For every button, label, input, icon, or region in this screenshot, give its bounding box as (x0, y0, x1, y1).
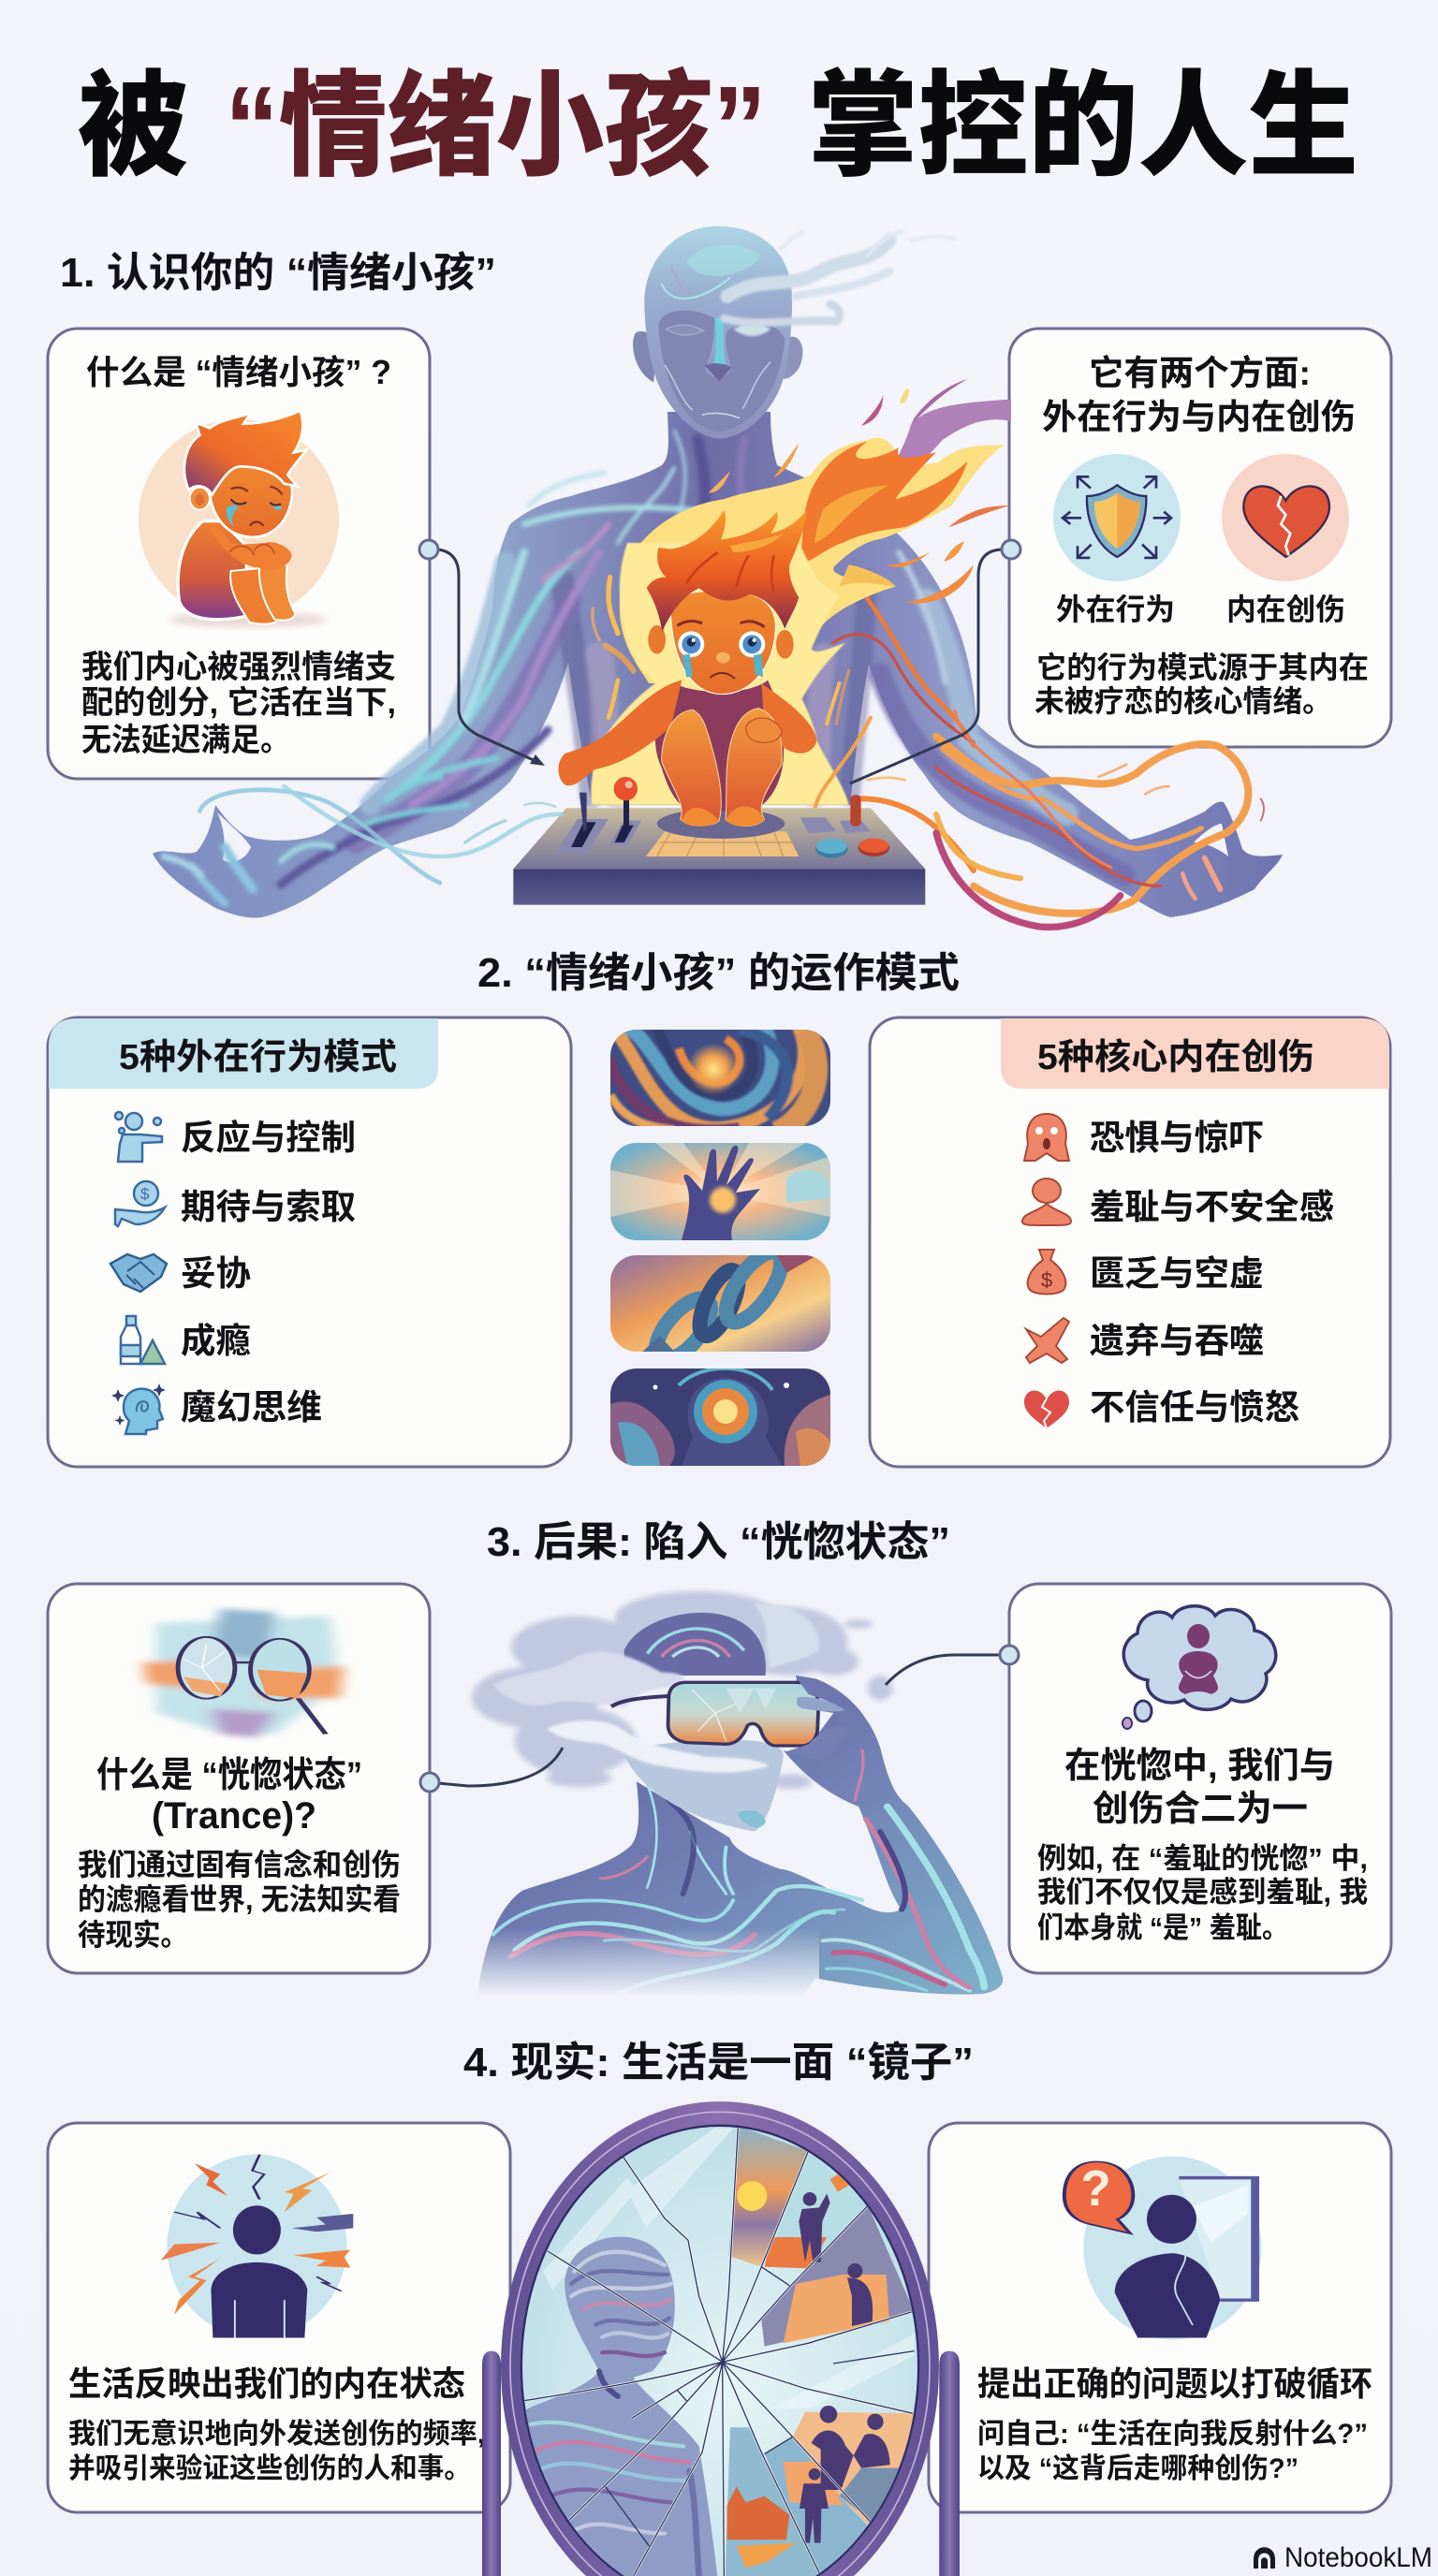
gaps inside hands (217, 812, 1228, 862)
card body text: 未被疗恋的核心情绪。 (1034, 684, 1332, 718)
item: compromise: 妥协 (181, 1254, 251, 1293)
card body text: 我们不仅仅是感到羞耻, 我 (1037, 1876, 1368, 1909)
item: scarcity: $ (1041, 1268, 1052, 1292)
icon labels: 内在创伤 (1226, 593, 1345, 626)
smoke from head (724, 231, 955, 323)
card heading: 什么是 “情绪小孩” ? (86, 353, 391, 391)
title (78, 63, 1358, 190)
connector: right card to goggles (886, 1646, 1019, 1685)
flames (620, 379, 1011, 683)
card body text: 们本身就 “是” 羞耻。 (1037, 1911, 1288, 1944)
tab heading (49, 1018, 438, 1089)
item: addiction: 成瘾 (181, 1322, 251, 1360)
icon: broken heart (1222, 454, 1349, 581)
card heading: 生活反映出我们的内在状态 (68, 2364, 465, 2403)
tab heading (1001, 1018, 1389, 1089)
reflected figure (521, 2237, 721, 2576)
panel: what is trance (48, 1584, 430, 1973)
item: expectation and demand (115, 1181, 356, 1226)
title: “情绪小孩” (225, 63, 767, 190)
icon: thought cloud with meditating figure (1123, 1606, 1276, 1729)
card body text: 我们内心被强烈情绪支 (81, 650, 396, 685)
glow around child (591, 543, 849, 805)
card body text (1037, 1842, 1368, 1944)
icon labels: 外在行为 (1056, 593, 1175, 626)
card heading: 提出正确的问题以打破循环 (977, 2364, 1372, 2403)
card body text (78, 1848, 401, 1952)
item: shame: 羞耻与不安全感 (1090, 1188, 1334, 1226)
image: swirl (610, 1030, 830, 1126)
card heading (96, 1756, 362, 1837)
panel: what is the emotional child (48, 329, 430, 779)
item: abandonment: 遗弃与吞噬 (1090, 1322, 1264, 1360)
central images column (599, 1020, 830, 1466)
heading: section 3: 3. 后果: 陷入 “恍惚状态” (487, 1519, 950, 1565)
image: chain (610, 1255, 830, 1352)
heading: section 4: 4. 现实: 生活是一面 “镜子” (463, 2040, 974, 2086)
heading: section 1: 1. 认识你的 “情绪小孩” (60, 250, 496, 296)
connector: left card to child (419, 540, 545, 766)
item: magical thinking (111, 1383, 322, 1434)
panel: five outer behaviours (48, 1017, 571, 1467)
item: fear: 恐惧与惊吓 (1090, 1119, 1264, 1157)
item: compromise (110, 1254, 251, 1293)
tab heading: 5种外在行为模式 (119, 1038, 397, 1077)
cloud behind head (472, 1591, 892, 1789)
flame tongues beside child and strands on the right side (593, 578, 974, 871)
icon: person with lightning bolts (161, 2155, 353, 2338)
card body text: 例如, 在 “羞耻的恍惚” 中, (1037, 1842, 1368, 1875)
soft colour areas and strands on arms and shoulders (164, 431, 1123, 903)
item: fear (1024, 1114, 1264, 1161)
item: expectation and demand: 期待与索取 (181, 1188, 356, 1226)
head (633, 227, 802, 438)
fluffy cloud over face (493, 1603, 819, 1773)
card body text: 的滤瘾看世界, 无法知实看 (78, 1882, 401, 1916)
panel: ask the right question (929, 2123, 1391, 2512)
item: distrust: 不信任与愤怒 (1090, 1388, 1299, 1427)
figure body and arms (153, 412, 1283, 918)
illustration: broken mirror (482, 2097, 964, 2576)
card body text: 配的创分, 它活在当下, (81, 685, 396, 721)
icon: crying child in circle (139, 411, 339, 627)
illustration: figure with cracked goggles and cloud (463, 1591, 1003, 2014)
connector: trance card to cloud (420, 1748, 563, 1792)
scene shards (728, 2127, 809, 2267)
panel: two aspects (1009, 329, 1391, 747)
flowing ribbons on hands (199, 786, 562, 883)
fade at bottom of figure (463, 1928, 819, 2014)
card body text: 无法延迟满足。 (81, 723, 290, 758)
icon: shield with arrows (1053, 454, 1181, 581)
card body text: 以及 “这背后走哪种创伤?” (977, 2453, 1299, 2484)
image: spiral in head (610, 1368, 830, 1466)
icon labels (1056, 593, 1345, 626)
item: scarcity: 匮乏与空虚 (1090, 1254, 1264, 1293)
panel: merged with the wound (1009, 1584, 1391, 1973)
icon: cracked glasses on blurred scene (142, 1609, 345, 1737)
mirror frame (501, 2101, 939, 2576)
connector: right card to console (850, 540, 1020, 783)
tab heading: 5种核心内在创伤 (1037, 1038, 1314, 1077)
card body text: 问自己: “生活在向我反射什么?” (977, 2419, 1368, 2450)
card body text: 我们通过固有信念和创伤 (78, 1848, 401, 1881)
item: reaction and control: 反应与控制 (181, 1119, 356, 1157)
central child (558, 591, 817, 827)
card heading: 创伤合二为一 (1093, 1790, 1308, 1829)
card heading: 在恍惚中, 我们与 (1064, 1747, 1335, 1786)
mirror glass (522, 2127, 917, 2576)
card heading: (Trance)? (152, 1795, 316, 1837)
item: scarcity (1028, 1250, 1264, 1294)
small figures (799, 2192, 890, 2543)
head dome (624, 1613, 766, 1676)
mirror stand posts (482, 2351, 960, 2576)
title: 掌控的人生 (808, 63, 1358, 190)
card body text (977, 2419, 1368, 2484)
title: 被 (78, 63, 188, 190)
item: shame (1022, 1178, 1334, 1226)
item: abandonment (1026, 1318, 1264, 1363)
heading: section 2: 2. “情绪小孩” 的运作模式 (477, 950, 960, 996)
card heading: 外在行为与内在创伤 (1042, 398, 1356, 436)
card body text (81, 650, 396, 758)
body strands (493, 1750, 984, 1994)
cracks (522, 2128, 915, 2576)
icon: person before mirror with question bubble: ? (1080, 2160, 1111, 2217)
card body text (1034, 651, 1369, 718)
item: addiction (121, 1316, 251, 1364)
card body text: 我们无意识地向外发送创伤的频率, (68, 2419, 485, 2450)
image: reaching hand (610, 1143, 830, 1240)
card heading: 它有两个方面: (1089, 354, 1311, 392)
illustration: adult figure with inner child at control console (153, 227, 1283, 927)
face (623, 1739, 784, 1832)
card heading (1064, 1747, 1335, 1829)
item: magical thinking: 魔幻思维 (181, 1388, 322, 1427)
goggles (611, 1696, 672, 1706)
panel: life reflects inner state (48, 2123, 510, 2512)
panel: five core wounds (870, 1017, 1390, 1467)
card body text: 它的行为模式源于其内在 (1036, 651, 1369, 684)
card body text: 待现实。 (78, 1918, 188, 1952)
item: reaction and control (115, 1112, 356, 1162)
fingers (796, 1677, 858, 1711)
card heading (1042, 354, 1356, 436)
child hair (647, 510, 807, 632)
body (478, 1676, 1003, 2012)
icon: person before mirror with question bubble (1064, 2157, 1262, 2339)
card heading: 什么是 “恍惚状态” (96, 1756, 362, 1795)
item: expectation and demand: $ (140, 1185, 150, 1203)
card body text: 并吸引来验证这些创伤的人和事。 (68, 2453, 471, 2484)
card body text (68, 2419, 485, 2484)
console (513, 777, 925, 905)
